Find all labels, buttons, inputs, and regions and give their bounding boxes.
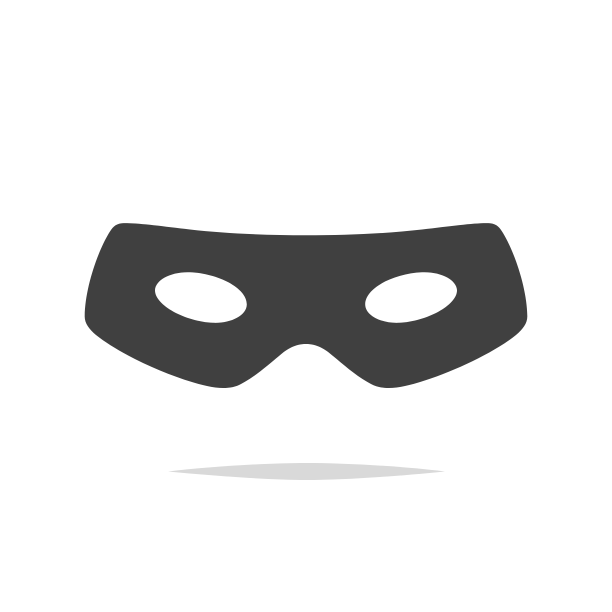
- shadow beneath mask: [168, 463, 445, 480]
- icon: black eye mask: [85, 223, 527, 388]
